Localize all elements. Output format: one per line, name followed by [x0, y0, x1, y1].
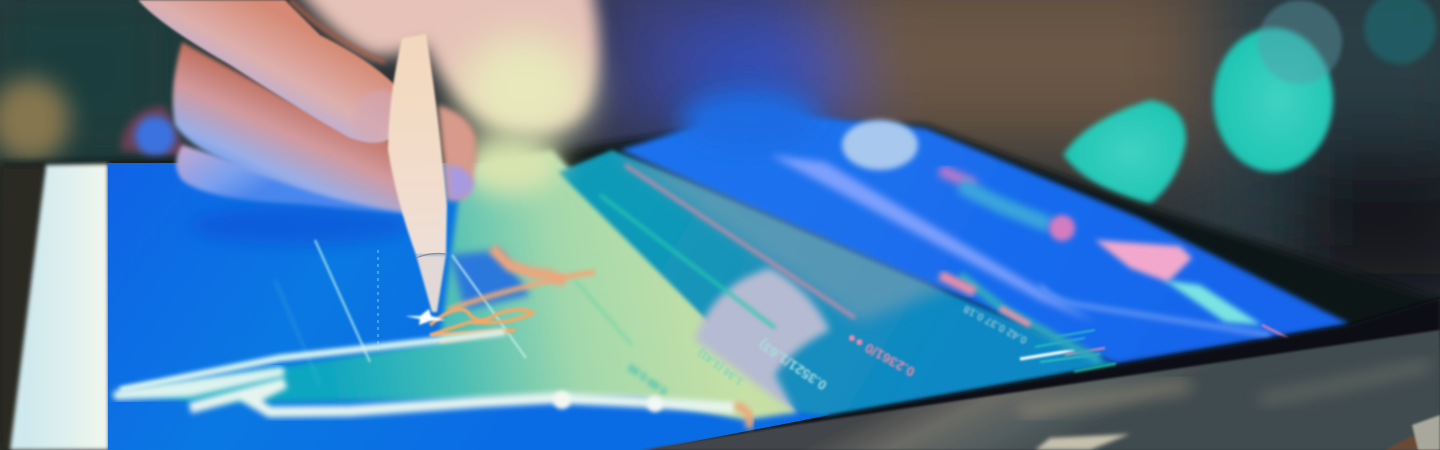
tablet body	[0, 125, 1440, 450]
silver frame	[640, 330, 1440, 450]
price chart: upper right line	[842, 120, 1288, 338]
bokeh: faint ring	[1258, 0, 1342, 84]
price chart: teal panel ticks	[600, 165, 1116, 372]
chart: orange line	[448, 272, 595, 310]
table corner	[1385, 436, 1440, 450]
frame lower reflection	[1035, 434, 1130, 450]
back finger behind pen	[438, 105, 476, 200]
screen: green chart fill	[130, 150, 798, 420]
axis label: green panel value: 1.34 (1.41)	[695, 346, 746, 387]
screen: light streak	[770, 155, 1095, 322]
screen: white sidebar	[10, 164, 109, 450]
chart: star touch point	[405, 309, 446, 325]
stylus body	[388, 34, 447, 255]
bokeh lights	[1063, 0, 1436, 204]
shadow between fingers	[290, 0, 385, 62]
axis label: teal value: 0.3521/1.63)	[756, 337, 830, 394]
thumb and palm	[290, 0, 599, 130]
bokeh: teal heart shape	[1063, 100, 1186, 204]
screen: pale reflection	[695, 268, 830, 412]
axis label: green date: 0.88 0.95	[626, 361, 670, 397]
screen: teal panel	[558, 150, 1116, 416]
chart: vertical guide lines	[275, 240, 632, 385]
ring finger	[176, 145, 420, 215]
grey axis text: 0.42 0.37 0.18	[962, 302, 1029, 346]
tablet metal edge	[640, 298, 1440, 450]
screen: blue glow above panel	[680, 90, 820, 150]
middle finger	[173, 42, 420, 214]
axis labels	[626, 302, 1029, 397]
frame highlight	[1020, 385, 1190, 412]
index finger	[138, 0, 406, 142]
screen: bright blue panel	[620, 110, 1350, 364]
bokeh: large teal circle	[1213, 28, 1333, 172]
price chart: main white and orange line	[118, 240, 750, 428]
tablet screen	[10, 90, 1350, 450]
stylus tip	[416, 255, 446, 312]
fingernail	[352, 90, 402, 142]
bokeh: dim teal top right	[1364, 0, 1436, 64]
hand	[138, 0, 599, 215]
screen: faint curve	[1040, 285, 1270, 335]
dark bezel lip	[800, 298, 1440, 425]
screen: grey reflection	[610, 152, 970, 322]
screen: blue hand reflection	[190, 205, 410, 245]
palm to green blend	[460, 135, 560, 195]
screen: deep blue patch near peak	[450, 250, 530, 310]
stylus	[388, 34, 447, 312]
axis label: pink value: 0.2361/0 ●●	[844, 330, 917, 380]
palm glow	[460, 35, 590, 145]
screen: blue chart area	[108, 163, 830, 450]
chart: white lower line	[120, 332, 505, 390]
stylus seam	[416, 254, 446, 258]
